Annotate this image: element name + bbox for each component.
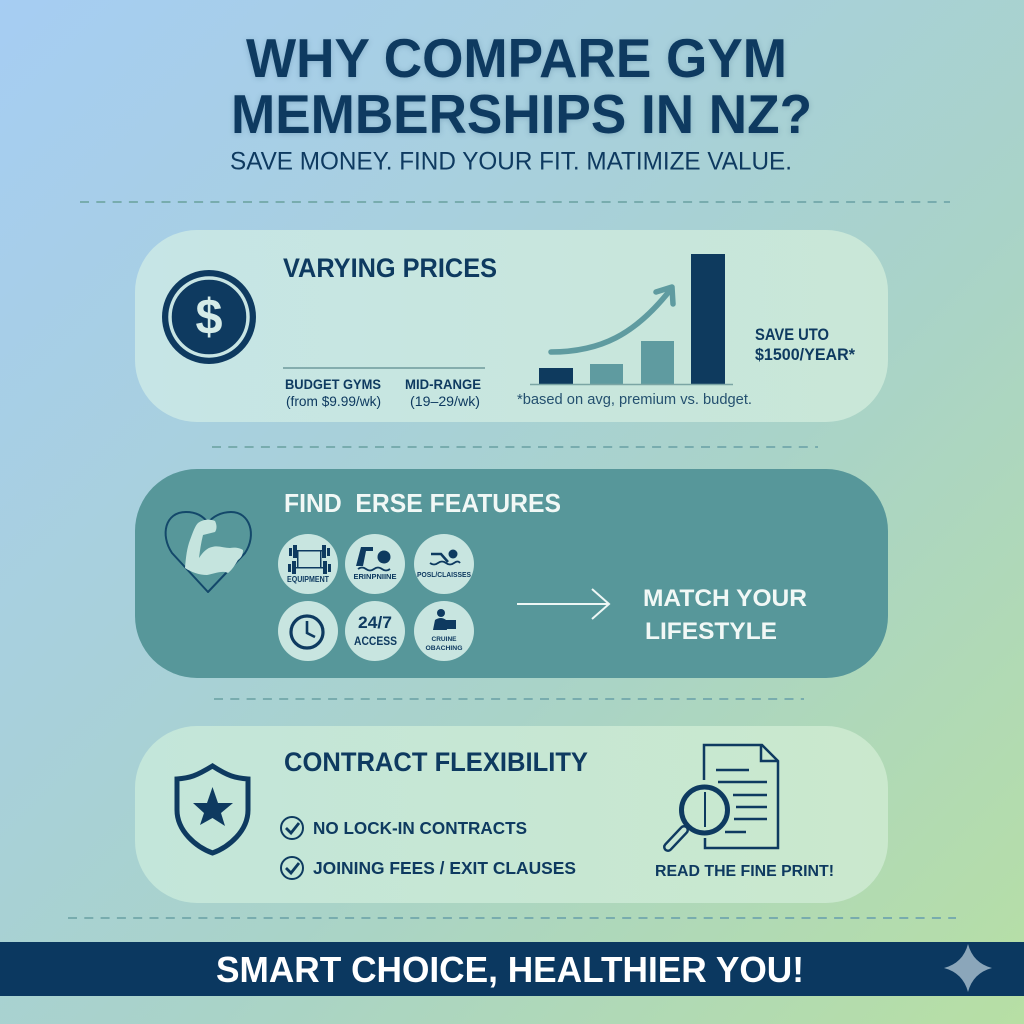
footnote: *based on avg, premium vs. budget. <box>517 391 752 408</box>
feature: pool and classes: POSL/CLAISSES <box>417 570 471 579</box>
caption: read the fine print: READ THE FINE PRINT! <box>655 863 834 880</box>
feature: online coaching: CRUINE <box>432 636 457 643</box>
feature: online coaching <box>414 601 474 661</box>
arrow: to lifestyle <box>517 589 609 619</box>
item: no lock-in contracts: NO LOCK-IN CONTRACTS <box>313 818 527 838</box>
title <box>231 27 812 145</box>
feature: 24/7 access: 24/7 <box>358 614 392 632</box>
feature: online coaching: OBACHING <box>426 645 462 652</box>
heading: find erse features: FIND ERSE FEATURES <box>284 488 561 518</box>
icon: sparkle <box>944 944 992 992</box>
callout: match your lifestyle: LIFESTYLE <box>645 618 777 645</box>
panel: contract flexibility <box>135 726 888 903</box>
arrow: rising trend <box>551 287 673 352</box>
feature: swimming person <box>345 534 405 594</box>
icon: document with magnifier <box>668 745 778 848</box>
item: joining fees: JOINING FEES / EXIT CLAUSES <box>313 858 576 878</box>
heading: contract flexibility: CONTRACT FLEXIBILITY <box>284 747 588 777</box>
bar chart <box>530 254 733 384</box>
feature: equipment: EQUIPMENT <box>287 575 329 584</box>
feature: clock <box>278 601 338 661</box>
feature: pool and classes <box>414 534 474 594</box>
icon: shield with star <box>177 766 248 853</box>
label: mid-range: MID-RANGE <box>405 376 481 392</box>
feature: 24/7 access: ACCESS <box>354 634 397 648</box>
feature: equipment <box>278 534 338 594</box>
callout: savings: SAVE UTO <box>755 326 829 344</box>
heading: varying prices: VARYING PRICES <box>283 253 497 283</box>
label: mid-range: (19–29/wk) <box>410 393 480 409</box>
feature: 24/7 access <box>345 601 405 661</box>
panel: varying prices <box>135 230 888 422</box>
banner: SMART CHOICE, HEALTHIER YOU! <box>216 949 804 990</box>
label: budget gyms: BUDGET GYMS <box>285 376 381 392</box>
icon: dollar coin <box>162 270 256 364</box>
callout: savings <box>755 326 856 364</box>
subtitle: SAVE MONEY. FIND YOUR FIT. MATIMIZE VALUE. <box>230 148 792 176</box>
label: budget gyms <box>285 376 381 409</box>
title: MEMBERSHIPS IN NZ? <box>231 83 812 145</box>
callout: savings: $1500/YEAR* <box>755 346 856 364</box>
banner <box>0 942 1024 996</box>
label: mid-range <box>405 376 481 409</box>
icon: heart with flexed arm <box>166 512 251 592</box>
panel: diverse features <box>135 469 888 678</box>
title: WHY COMPARE GYM <box>246 27 787 89</box>
callout: match your lifestyle: MATCH YOUR <box>643 585 807 612</box>
label: budget gyms: (from $9.99/wk) <box>286 393 381 409</box>
feature: swimming person: ERINPNIINE <box>354 574 397 581</box>
callout: match your lifestyle <box>643 585 807 645</box>
icon: dollar coin: $ <box>196 289 223 345</box>
